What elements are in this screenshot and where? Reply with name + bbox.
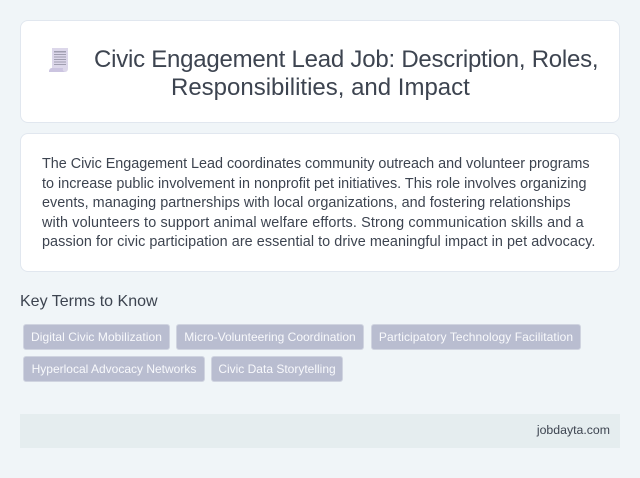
tag [211, 356, 343, 382]
tag: Participatory Technology Facilitation [379, 330, 573, 344]
heading: key terms: Key Terms to Know [20, 293, 158, 310]
description text: to increase public involvement in nonprofit pet initiatives. This role involves organizing [42, 176, 586, 192]
description text: with volunteers to support animal welfare efforts. Strong communication skills and a [42, 215, 584, 231]
description text [42, 156, 595, 250]
tag [371, 324, 581, 350]
description panel [20, 133, 620, 272]
title: Civic Engagement Lead Job: Description, Roles, [94, 46, 598, 73]
tag: Micro-Volunteering Coordination [184, 330, 356, 344]
footer bar [20, 414, 620, 448]
tag [23, 324, 170, 350]
tag: Hyperlocal Advocacy Networks [32, 362, 196, 376]
icon: document scroll [49, 48, 68, 72]
tag: Civic Data Storytelling [218, 362, 336, 376]
tag [176, 324, 364, 350]
tag [23, 356, 205, 382]
header panel [20, 20, 620, 123]
description text: The Civic Engagement Lead coordinates community outreach and volunteer programs [42, 156, 590, 172]
description text: events, managing partnerships with local organizations, and fostering relationships [42, 195, 571, 211]
key terms tags [23, 324, 581, 382]
tag: Digital Civic Mobilization [31, 330, 162, 344]
description text: passion for civic participation are essential to drive meaningful impact in pet advocacy. [42, 234, 595, 250]
title [94, 46, 598, 101]
footer source: jobdayta.com [537, 423, 610, 437]
title: Responsibilities, and Impact [171, 74, 470, 101]
